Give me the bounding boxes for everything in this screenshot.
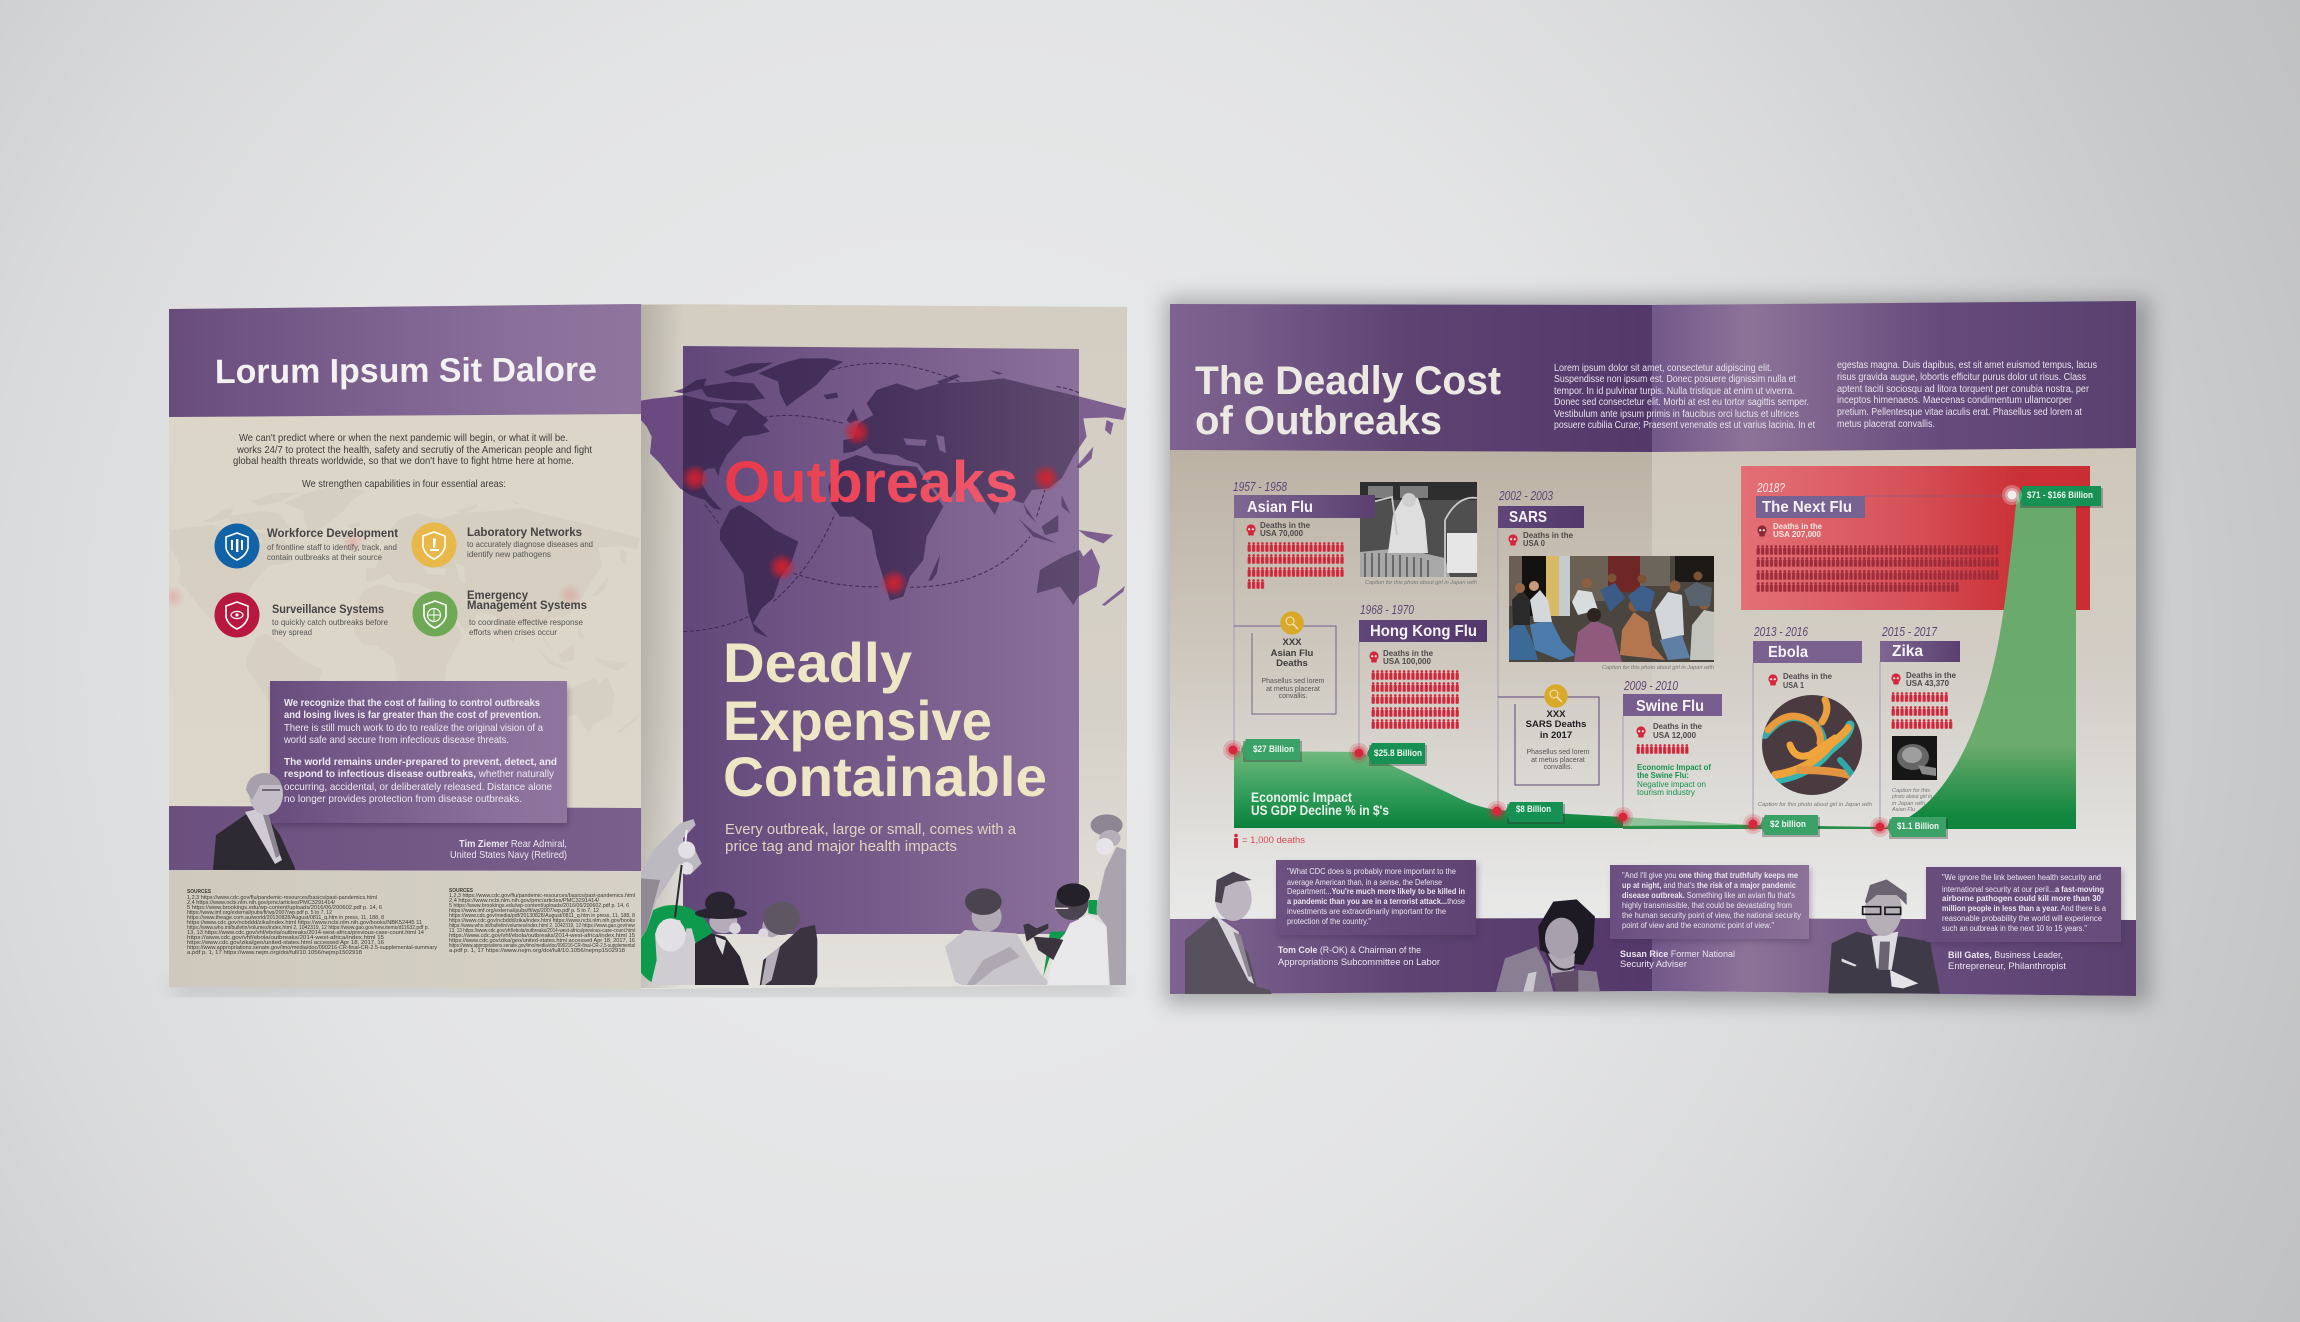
- quote 1: protection of the country.": [1287, 917, 1371, 926]
- zika block: Caption for this: [1892, 788, 1930, 794]
- intro text: We can't predict where or when the next pandemic will begin, or what it will be.: [239, 432, 568, 444]
- ebola block: 2013 - 2016: [1753, 624, 1809, 639]
- feature: workforce: contain outbreaks at their source: [267, 552, 382, 562]
- quote 3: airborne pathogen could kill more than 30: [1942, 894, 2102, 903]
- attribution 1: Appropriations Subcommittee on Labor: [1278, 957, 1440, 968]
- main title: [1195, 359, 1501, 443]
- shadows: [175, 298, 2150, 1004]
- icon: laboratory: [412, 522, 456, 568]
- callout box: The world remains under-prepared to prevent, detect, and: [284, 756, 557, 768]
- quote 1: Department...You're much more likely to be killed in: [1287, 887, 1465, 896]
- ebola block: Caption for this photo about girl in Japan with: [1758, 802, 1872, 808]
- quote 2: the human security point of view, the national security: [1622, 911, 1801, 920]
- sources left: https://www.cdc.gov/zika/geo/united-states.html accessed Apr 18, 2017, 16: [187, 940, 384, 946]
- feature: laboratory: identify new pathogens: [467, 549, 552, 559]
- sources right: https://www.cdc.gov/vhf/ebola/outbreaks/2014-west-africa/index.html 15: [449, 933, 635, 939]
- data points: [1223, 485, 2022, 837]
- icon: workforce: [214, 524, 260, 568]
- swine flu block: the Swine Flu:: [1637, 770, 1689, 780]
- feature: surveillance: they spread: [272, 627, 312, 637]
- portrait: Tim Ziemer: [213, 773, 295, 870]
- sars block: SARS: [1509, 509, 1547, 526]
- cover base: [641, 304, 1127, 989]
- sources left: https://www.theage.com.au/world/20130828/August/0811_q.htm in press, 11, 188, 8: [187, 915, 384, 921]
- zika block: photo about girl in: [1891, 794, 1932, 800]
- intro column 2: pretium. Pellentesque vitae iaculis erat. Phasellus sed lorem at: [1837, 407, 2082, 418]
- sources right: https://www.cdc.gov/ncbddd/zika/index.html https://www.ncbi.nlm.nih.gov/books: [449, 918, 636, 924]
- headline: [723, 631, 1047, 808]
- quote 3: such an outbreak in the next 10 to 15 years.": [1942, 924, 2087, 933]
- intro column 2: metus placerat convallis.: [1837, 419, 1935, 430]
- callout box: and losing lives is far greater than the cost of prevention.: [284, 709, 541, 721]
- sources left: [187, 889, 438, 956]
- hong kong flu block: Hong Kong Flu: [1370, 623, 1477, 640]
- feature: emergency: Management Systems: [467, 600, 587, 612]
- callout shadow: [272, 686, 568, 826]
- world map outside poster: [641, 358, 1126, 638]
- feature: laboratory: [467, 527, 593, 559]
- panel: back page left brochure: [161, 304, 641, 989]
- intro column 1: posuere cubilia Curae; Praesent venenatis est ut varius lacinia. In et: [1554, 420, 1815, 431]
- headline: Deadly: [723, 631, 912, 694]
- top band: [169, 304, 641, 417]
- attribution 1: [1278, 945, 1440, 968]
- tag: $8 Billion: [1505, 802, 1565, 824]
- quote 3: reasonable probability the world will experience: [1942, 914, 2103, 923]
- red panel: the next flu: The Next Flu: [1762, 499, 1852, 516]
- feature: workforce: [267, 528, 398, 562]
- dashed routes: [683, 363, 1080, 632]
- page base: [169, 304, 641, 989]
- bottom band left: [1170, 918, 1652, 994]
- quote 1: "What CDC does is probably more important to the: [1287, 867, 1457, 876]
- asian flu block: 1957 - 1958: [1233, 479, 1288, 494]
- attribution 3: Entrepreneur, Philanthropist: [1948, 961, 2066, 972]
- swine flu block: Economic Impact of: [1637, 762, 1711, 772]
- outbreak markers: [681, 418, 1060, 597]
- icon: emergency: [412, 592, 458, 636]
- world map inside poster: [683, 358, 1079, 638]
- subtitle: Every outbreak, large or small, comes with a: [725, 821, 1017, 838]
- bottom band right: [1652, 918, 2136, 996]
- sources left: https://www.cdc.gov/vhf/ebola/outbreaks/2014-west-africa/index.html 15: [187, 935, 384, 941]
- quote 1: [1276, 860, 1478, 938]
- feature: emergency: to coordinate effective response: [469, 617, 583, 627]
- sources right: 13, 13 https://www.cdc.gov/vhf/ebola/outbreaks/2014-west-africa/previous-case-count.html: [449, 928, 635, 934]
- callout: sars deaths: XXX: [1546, 709, 1566, 720]
- quote 2: disease outbreak. Something like an avian flu that's: [1622, 891, 1795, 900]
- tag: $71 - $166 Billion: $71 - $166 Billion: [2027, 490, 2093, 501]
- zika block: Deaths in the: [1906, 670, 1956, 680]
- photo: brain scan: [1892, 736, 1937, 780]
- icon: surveillance: [214, 592, 260, 638]
- attribution: [450, 839, 567, 861]
- sources right: 2,4 https://www.ncbi.nlm.nih.gov/pmc/articles/PMC3291414/: [449, 898, 600, 904]
- quote 2: "And I'll give you one thing that truthfully keeps me: [1622, 871, 1799, 880]
- callout box: We recognize that the cost of failing to control outbreaks: [284, 697, 540, 709]
- tag: $25.8 Billion: $25.8 Billion: [1374, 748, 1422, 759]
- tag: $27 Billion: $27 Billion: [1253, 744, 1294, 755]
- economic impact label: [1251, 790, 1389, 818]
- callout box: respond to infectious disease outbreaks, whether naturally: [284, 768, 555, 780]
- feature: surveillance: to quickly catch outbreaks before: [272, 617, 388, 627]
- sources right: https://www.imf.org/external/pubs/ft/wp/2007/wp.pdf p. 5 to 7, 12: [449, 908, 599, 914]
- attribution 3: [1948, 950, 2066, 972]
- sars block: USA 0: [1523, 538, 1545, 548]
- red panel: the next flu: [1741, 466, 2090, 610]
- portrait: Bill Gates: [1828, 879, 1940, 993]
- callout: asian flu deaths: [1234, 611, 1336, 714]
- zika block: in Japan with: [1892, 801, 1925, 807]
- headline: Expensive: [723, 689, 992, 752]
- icon: magnifier sars: [1544, 684, 1568, 708]
- sources right: [449, 888, 636, 954]
- feature: emergency: Emergency: [467, 590, 529, 602]
- asian flu block: [1233, 479, 1477, 589]
- callout: asian flu deaths: Phasellus sed lorem: [1261, 678, 1325, 685]
- callout: sars deaths: convallis.: [1544, 764, 1572, 771]
- quote 3: international security at our peril...a fast-moving: [1942, 885, 2104, 894]
- attribution 3: Bill Gates, Business Leader,: [1948, 950, 2063, 961]
- lower band: [169, 806, 641, 871]
- feature: surveillance: [272, 604, 388, 637]
- swine flu block: Deaths in the: [1653, 721, 1702, 731]
- right page body: [1652, 448, 2136, 996]
- subtitle: price tag and major health impacts: [725, 838, 957, 855]
- quote 3: "We ignore the link between health security and: [1942, 873, 2101, 882]
- hong kong flu block: Deaths in the: [1383, 648, 1433, 658]
- economic impact label: Economic Impact: [1251, 790, 1352, 805]
- intro text: global health threats worldwide, so that we don't have to fight htme here at home.: [233, 455, 574, 467]
- attribution: Tim Ziemer Rear Admiral,: [459, 839, 567, 850]
- callout box: occurring, accidental, or deliberately released. Distance alone: [284, 781, 552, 793]
- feature: laboratory: to accurately diagnose diseases and: [467, 539, 593, 549]
- red panel: the next flu: USA 207,000: [1773, 529, 1821, 539]
- asian flu block: USA 70,000: [1260, 528, 1303, 538]
- photo: asian flu: [1360, 482, 1477, 577]
- intro column 1: Vestibulum ante ipsum primis in faucibus orci luctus et ultrices: [1554, 409, 1799, 420]
- swine flu block: USA 12,000: [1653, 730, 1696, 740]
- sources left: a.pdf p. 1, 17 https://www.nejm.org/doi/full/10.1056/nejmp1502918: [187, 950, 362, 956]
- sources left: 13, 13 https://www.cdc.gov/vhf/ebola/outbreaks/2014-west-africa/previous-case-count.html 14: [187, 930, 424, 936]
- swine flu block: 2009 - 2010: [1623, 678, 1679, 693]
- sources left: 5 https://www.brookings.edu/wp-content/uploads/2016/06/200602.pdf p. 14, 6: [187, 905, 382, 911]
- feature: emergency: [467, 590, 587, 637]
- quote 3: million people in less than a year. And there is a: [1942, 904, 2106, 913]
- economic impact label: US GDP Decline % in $'s: [1251, 803, 1389, 818]
- sources right: https://www.cdc.gov/zika/geo/united-states.html accessed Apr 18, 2017, 16: [449, 938, 635, 944]
- intro column 2: egestas magna. Duis dapibus, est sit amet euismod tempus, lacus: [1837, 360, 2097, 371]
- tag: $2 billion: [1760, 815, 1820, 837]
- left page body: [1170, 450, 1652, 994]
- subtitle: [725, 821, 1017, 855]
- tag: $8 Billion: $8 Billion: [1516, 804, 1551, 815]
- hong kong flu block: [1359, 602, 1487, 729]
- sources right: 1,2,3 https://www.cdc.gov/flu/pandemic-resources/basics/past-pandemics.html: [449, 893, 635, 899]
- tag: $1.1 Billion: $1.1 Billion: [1897, 821, 1939, 832]
- main title: of Outbreaks: [1195, 399, 1442, 443]
- headline: Containable: [723, 745, 1047, 808]
- sources left: https://www.appropriations.senate.gov/imo/media/doc/090216-CR-final-CR-2.5-supplemental-summary: [187, 945, 438, 951]
- top band right: [1652, 301, 2136, 452]
- callout: sars deaths: SARS Deaths: [1526, 719, 1586, 730]
- swine flu block: [1623, 678, 1722, 797]
- callout box: world safe and secure from infectious disease threats.: [283, 734, 509, 746]
- callout: asian flu deaths: convallis.: [1279, 693, 1307, 700]
- sars block: 2002 - 2003: [1498, 488, 1554, 503]
- legend: = 1,000 deaths: [1242, 835, 1305, 846]
- swine flu block: tourism industry: [1637, 787, 1696, 797]
- quote 2: highly transmissible, that could be devastating from: [1622, 901, 1792, 910]
- attribution 2: Security Adviser: [1620, 959, 1687, 970]
- feature: laboratory: Laboratory Networks: [467, 527, 582, 539]
- quote 1: a pandemic than you are in a terrorist attack...those: [1287, 897, 1465, 906]
- chart: economic impact area: [1234, 495, 2076, 829]
- callout: asian flu deaths: at metus placerat: [1266, 686, 1320, 693]
- purple poster: [683, 346, 1079, 934]
- swine flu block: Swine Flu: [1636, 698, 1704, 715]
- sources left: https://www.cdc.gov/ncbddd/zika/index.html https://www.ncbi.nlm.nih.gov/books/NBK52445 11: [187, 920, 422, 926]
- callout: sars deaths: [1498, 684, 1599, 785]
- tag: $71 - $166 Billion: [2018, 486, 2103, 508]
- zika block: 2015 - 2017: [1881, 624, 1938, 639]
- tag: $25.8 Billion: [1367, 743, 1427, 766]
- intro column 2: risus gravida augue, lobortis efficitur purus dolor ut risus. Class: [1837, 372, 2086, 383]
- sources right: https://www.cdc.gov/media/pdf/20130828/August/0811_q.htm in press, 11, 188, 8: [449, 913, 635, 919]
- faint map: [169, 534, 582, 606]
- quote 2: up at night, and that's the risk of a major pandemic: [1622, 881, 1796, 890]
- intro text: We strengthen capabilities in four essential areas:: [302, 478, 506, 490]
- zika block: Asian Flu: [1891, 807, 1915, 813]
- quote 3: [1926, 867, 2123, 945]
- feature: workforce: of frontline staff to identify, track, and: [267, 542, 397, 552]
- top band left: [1170, 304, 1652, 452]
- callout box: There is still much work to do to realize the original vision of a: [284, 722, 543, 734]
- quote 2: [1610, 865, 1811, 942]
- sources right: https://www.who.int/bulletin/volumes/index.html 2, 1042319, 12 https://www.gao.gov/new: [449, 923, 635, 929]
- ebola block: Deaths in the: [1783, 671, 1832, 681]
- quote 1: average American than, in a sense, the Defense: [1287, 878, 1442, 887]
- intro column 1: [1554, 363, 1815, 431]
- panel: inside spread right brochure: [1170, 301, 2136, 996]
- callout box: no longer provides protection from disease outbreaks.: [284, 793, 522, 805]
- callout: asian flu deaths: Asian Flu: [1271, 648, 1314, 659]
- photo: ebola virus: [1762, 695, 1862, 795]
- tag: $2 billion: $2 billion: [1770, 819, 1806, 830]
- quote 2: point of view and the economic point of view.": [1622, 921, 1774, 930]
- title: Lorum Ipsum Sit Dalore: [215, 351, 597, 391]
- hong kong flu block: USA 100,000: [1383, 656, 1431, 666]
- sars block: [1498, 488, 1714, 671]
- sources bottom: [169, 870, 641, 989]
- tag: $27 Billion: [1241, 739, 1302, 762]
- intro text: [233, 432, 592, 490]
- hong kong flu block: 1968 - 1970: [1360, 602, 1415, 617]
- attribution 2: Susan Rice Former National: [1620, 949, 1735, 960]
- asian flu block: Deaths in the: [1260, 520, 1310, 530]
- feature: surveillance: Surveillance Systems: [272, 604, 384, 616]
- sources left: 2,4 https://www.ncbi.nlm.nih.gov/pmc/articles/PMC3291414/: [187, 900, 336, 906]
- callout: sars deaths: at metus placerat: [1531, 757, 1585, 764]
- sars block: Deaths in the: [1523, 530, 1573, 540]
- title: Outbreaks: Outbreaks: [724, 450, 1018, 515]
- sources left: https://www.who.int/bulletin/volumes/index.html 2, 1042319, 12 https://www.gao.gov/new.items/d11632.pdf p.: [187, 925, 429, 931]
- photo collage right: [945, 814, 1126, 987]
- callout: sars deaths: in 2017: [1540, 730, 1572, 741]
- intro column 2: [1837, 360, 2097, 430]
- red panel: the next flu: 2018?: [1756, 480, 1786, 495]
- sars block: Caption for this photo about girl in Japan with: [1602, 665, 1714, 671]
- sources left: 1,2,3 https://www.cdc.gov/flu/pandemic-resources/basics/past-pandemics.html: [187, 895, 377, 901]
- main title: The Deadly Cost: [1195, 359, 1501, 403]
- intro column 2: inceptos himenaeos. Maecenas condimentum ullamcorper: [1837, 395, 2073, 406]
- zika block: USA 43,370: [1906, 678, 1949, 688]
- sources right: SOURCES: [449, 888, 474, 894]
- tag: $1.1 Billion: [1887, 817, 1948, 839]
- sources right: https://www.appropriations.senate.gov/imo/media/doc/090216-CR-final-CR-2.5-supplemental: [449, 943, 635, 949]
- sources left: SOURCES: [187, 889, 212, 895]
- ebola block: Ebola: [1768, 644, 1808, 661]
- intro column 1: Donec sed consectetur elit. Morbi at est eu tortor sagittis semper.: [1554, 397, 1809, 408]
- asian flu block: Asian Flu: [1247, 499, 1313, 516]
- panel: front cover: [632, 304, 1127, 989]
- intro text: works 24/7 to protect the health, safety and secrutiy of the American people and fight: [236, 444, 592, 456]
- callout: sars deaths: Phasellus sed lorem: [1526, 749, 1590, 756]
- intro column 2: aptent taciti sociosqu ad litora torquent per conubia nostra, per: [1837, 384, 2090, 395]
- zika block: Zika: [1892, 643, 1923, 660]
- quote 1: investments are extraordinarily important for the: [1287, 907, 1447, 916]
- portrait: Tom Cole: [1185, 872, 1272, 994]
- axis lines: [1234, 518, 1880, 826]
- red panel: the next flu: Deaths in the: [1773, 521, 1822, 531]
- attribution: United States Navy (Retired): [450, 850, 567, 861]
- callout box: [270, 681, 567, 823]
- zika block: [1880, 624, 1960, 813]
- photo collage left: [632, 819, 817, 988]
- sources left: https://www.imf.org/external/pubs/ft/wp/2007/wp.pdf p. 5 to 7, 12: [187, 910, 332, 916]
- ebola block: USA 1: [1783, 680, 1804, 690]
- legend: [1234, 834, 1305, 848]
- attribution 2: [1620, 949, 1735, 970]
- callout: asian flu deaths: XXX: [1282, 637, 1302, 648]
- feature: emergency: efforts when crises occur: [469, 627, 557, 637]
- ebola block: [1753, 624, 1872, 808]
- intro column 1: tempor. In id pulvinar turpis. Nulla tristique at enim ut viverra.: [1554, 386, 1795, 397]
- callout: asian flu deaths: Deaths: [1276, 658, 1308, 669]
- swine flu block: Negative impact on: [1637, 779, 1706, 789]
- portrait: Susan Rice: [1496, 899, 1600, 992]
- asian flu block: Caption for this photo about girl in Japan with: [1365, 580, 1477, 586]
- sources right: a.pdf p. 1, 17 https://www.nejm.org/doi/full/10.1056/nejmp1502918: [449, 948, 625, 954]
- attribution 1: Tom Cole (R-OK) & Chairman of the: [1278, 945, 1421, 956]
- photo: sars group: [1509, 556, 1714, 662]
- icon: magnifier: [1280, 611, 1304, 635]
- intro column 1: Suspendisse non ipsum est. Donec posuere dignissim nulla et: [1554, 374, 1796, 385]
- sources right: 5 https://www.brookings.edu/wp-content/uploads/2016/06/200602.pdf p. 14, 6: [449, 903, 629, 909]
- feature: workforce: Workforce Development: [267, 528, 398, 540]
- intro column 1: Lorem ipsum dolor sit amet, consectetur adipiscing elit.: [1554, 363, 1772, 374]
